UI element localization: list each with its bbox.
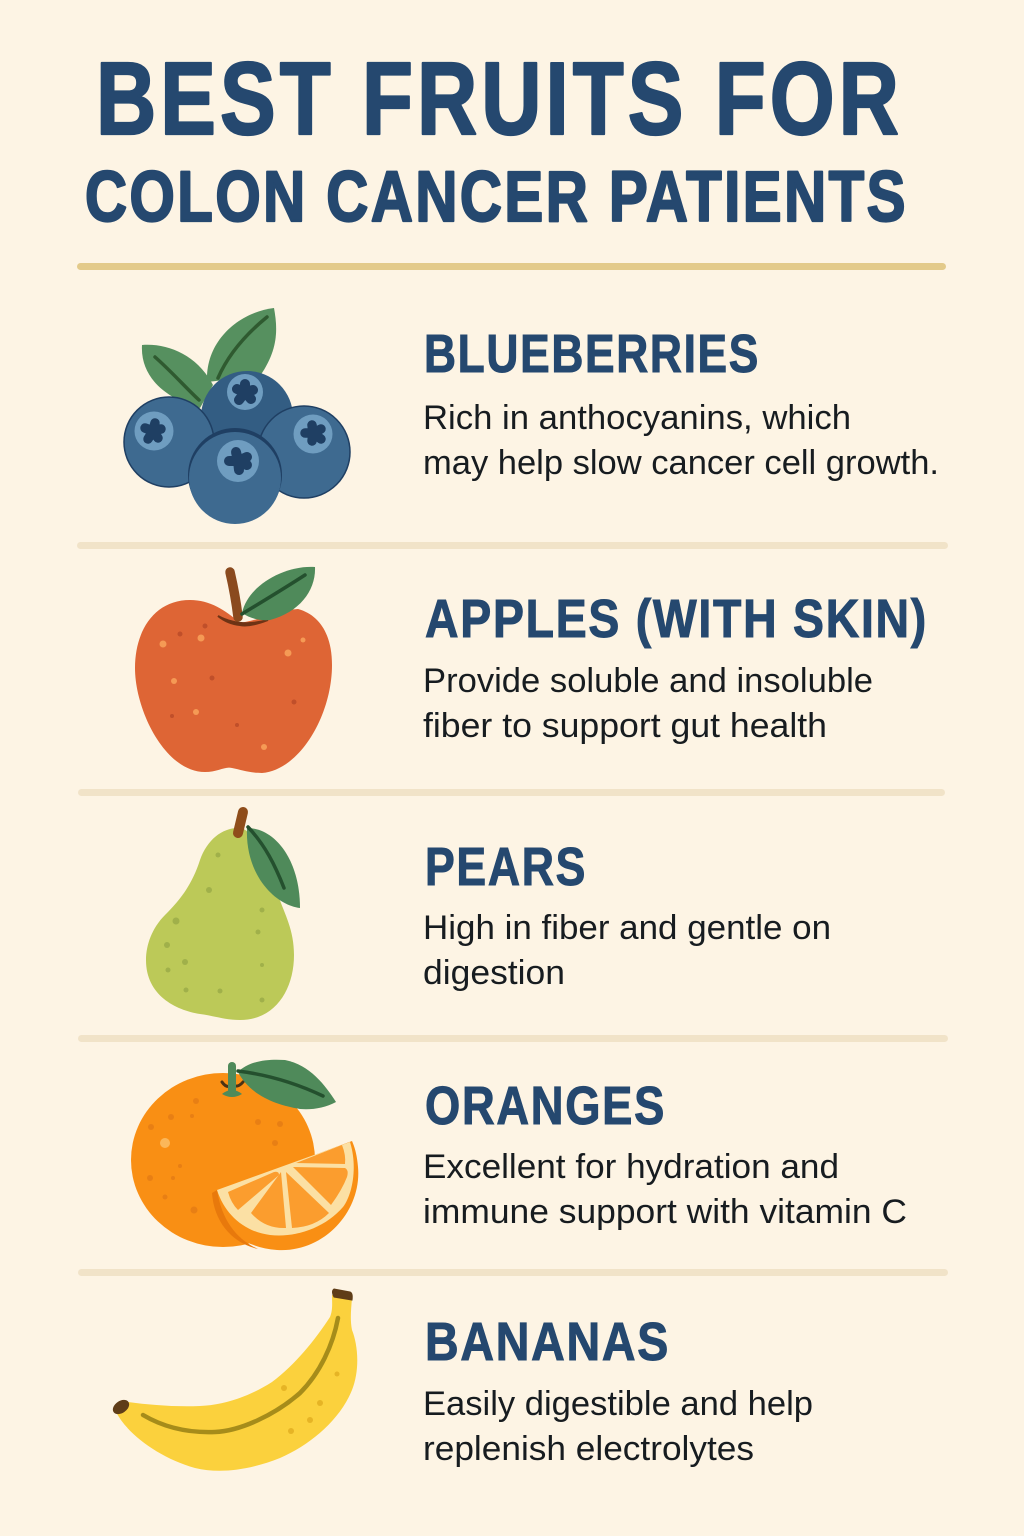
panel: blueberries xyxy=(124,308,939,524)
heading: pears: PEARS xyxy=(425,837,587,897)
text: bananas: replenish electrolytes xyxy=(423,1430,754,1468)
text: blueberries: Rich in anthocyanins, which xyxy=(423,399,851,437)
text: blueberries xyxy=(423,399,939,482)
panel: oranges xyxy=(131,1060,907,1250)
text: apples xyxy=(423,662,873,745)
text: pears: digestion xyxy=(423,954,565,992)
icon: banana xyxy=(110,1289,357,1471)
icon: pear xyxy=(146,812,300,1020)
text: bananas xyxy=(423,1385,813,1468)
heading: blueberries: BLUEBERRIES xyxy=(424,324,760,384)
text: apples: Provide soluble and insoluble xyxy=(423,662,873,700)
icon: apple xyxy=(135,567,332,773)
heading: bananas: BANANAS xyxy=(425,1312,670,1372)
text: oranges: Excellent for hydration and xyxy=(423,1148,839,1186)
panel: pears xyxy=(146,812,831,1020)
panel: bananas xyxy=(110,1289,813,1471)
panel: apples xyxy=(135,567,928,773)
text: pears xyxy=(423,909,831,992)
text: blueberries: may help slow cancer cell growth. xyxy=(423,444,939,482)
text: bananas: Easily digestible and help xyxy=(423,1385,813,1423)
heading: apples: APPLES (WITH SKIN) xyxy=(425,589,928,649)
title xyxy=(85,41,908,237)
text: pears: High in fiber and gentle on xyxy=(423,909,831,947)
heading: oranges: ORANGES xyxy=(425,1076,666,1136)
icon: blueberries xyxy=(124,308,350,524)
text: oranges xyxy=(423,1148,907,1231)
text: apples: fiber to support gut health xyxy=(423,707,827,745)
icon: orange xyxy=(131,1060,358,1250)
text: oranges: immune support with vitamin C xyxy=(423,1193,907,1231)
